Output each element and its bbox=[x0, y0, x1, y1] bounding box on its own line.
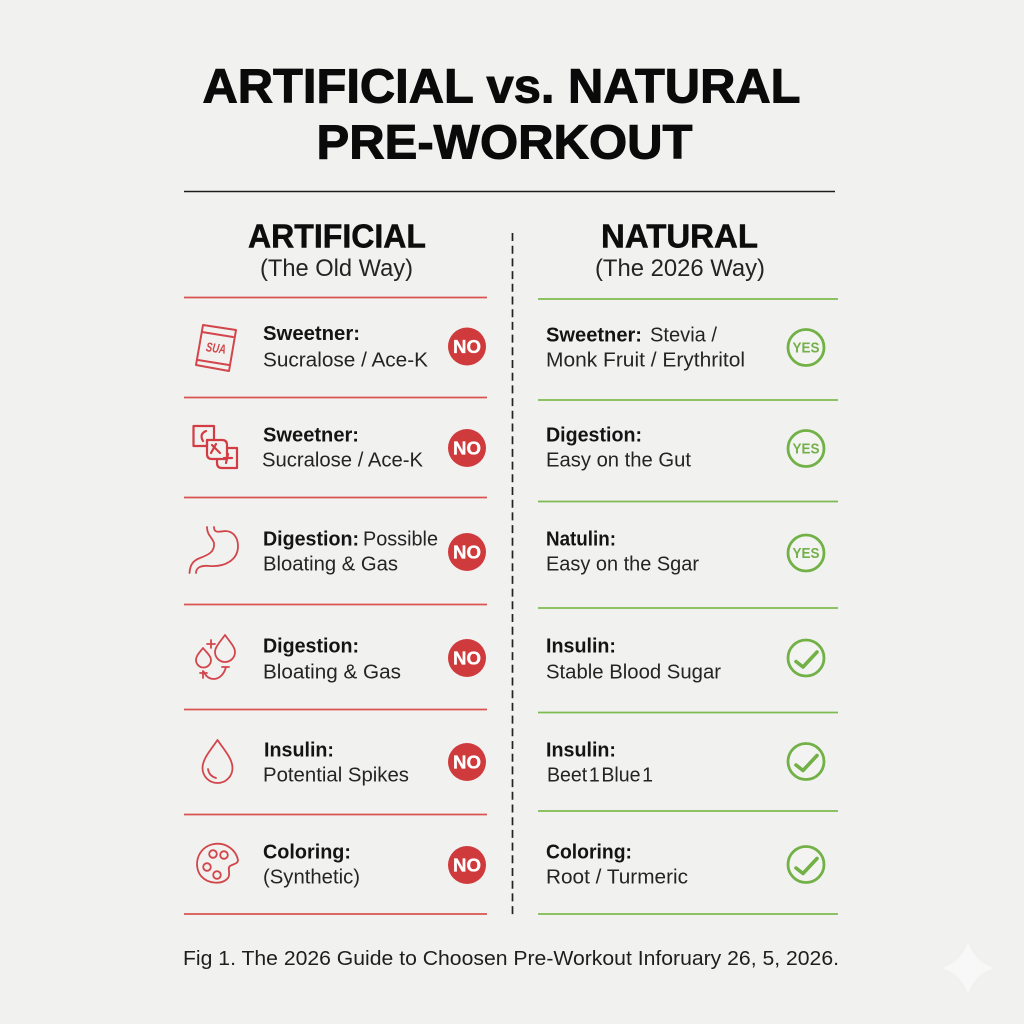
row: insulin stable: Stable Blood Sugar bbox=[546, 660, 721, 684]
badge: check bbox=[788, 846, 824, 882]
panel: artificial column bbox=[184, 298, 487, 914]
row: digestion bbox=[546, 424, 824, 472]
row: insulin: Potential Spikes bbox=[263, 764, 409, 786]
badge: no bbox=[448, 639, 486, 677]
badge: no: NO bbox=[453, 542, 481, 562]
row: sweetener packet bbox=[196, 322, 486, 372]
badge: no bbox=[448, 743, 486, 781]
row: insulin beet bbox=[546, 738, 824, 786]
title: PRE-WORKOUT bbox=[316, 116, 693, 170]
row: coloring bbox=[197, 840, 486, 888]
badge: no bbox=[448, 328, 486, 366]
row: digestion stomach: Digestion: bbox=[263, 528, 359, 550]
row: insulin beet: Insulin: bbox=[546, 738, 616, 762]
badge: yes bbox=[788, 330, 824, 366]
row: insulin stable bbox=[546, 634, 824, 684]
row: digestion drops: Bloating & Gas bbox=[263, 660, 401, 684]
icon: stomach bbox=[190, 527, 238, 573]
icon: drop bbox=[202, 740, 232, 783]
badge: yes: YES bbox=[792, 442, 820, 458]
row: sweetener: Monk Fruit / Erythritol bbox=[546, 348, 745, 372]
heading: natural: (The 2026 Way) bbox=[595, 255, 765, 282]
row: sweetener chemicals bbox=[194, 424, 486, 472]
row: insulin stable: Insulin: bbox=[546, 634, 616, 658]
icon: chemical tiles bbox=[194, 426, 237, 468]
row: digestion stomach bbox=[190, 527, 486, 576]
heading: artificial bbox=[248, 218, 426, 282]
row: coloring: Coloring: bbox=[546, 840, 632, 864]
title: ARTIFICIAL vs. NATURAL bbox=[202, 60, 800, 114]
row: coloring bbox=[546, 840, 824, 888]
badge: no: NO bbox=[453, 337, 481, 357]
title bbox=[202, 60, 800, 170]
row: digestion: Easy on the Gut bbox=[546, 448, 691, 472]
row: natulin: Natulin: bbox=[546, 528, 616, 550]
badge: no: NO bbox=[453, 648, 481, 668]
badge: no bbox=[448, 533, 486, 571]
icon: sparkle watermark bbox=[944, 944, 992, 992]
row: natulin: Easy on the Sgar bbox=[546, 552, 699, 576]
row: coloring: Coloring: bbox=[263, 840, 351, 864]
icon: palette bbox=[197, 844, 238, 883]
badge: no bbox=[448, 846, 486, 884]
row: digestion: Digestion: bbox=[546, 424, 642, 446]
row: insulin beet: Beet 1 Blue 1 bbox=[547, 764, 653, 786]
icon: sweetener packet: SUA bbox=[205, 339, 227, 357]
row: digestion drops bbox=[196, 634, 486, 684]
row: sweetener packet: Sweetner: bbox=[263, 322, 360, 345]
badge: yes bbox=[788, 430, 824, 466]
row: sweetener: Stevia / bbox=[650, 324, 717, 346]
icon: sweetener packet bbox=[196, 325, 236, 371]
row: sweetener packet: Sucralose / Ace-K bbox=[263, 348, 428, 372]
row: insulin bbox=[202, 738, 486, 786]
badge: yes: YES bbox=[792, 341, 820, 357]
caption: Fig 1. The 2026 Guide to Choosen Pre-Workout Inforuary 26, 5, 2026. bbox=[183, 947, 839, 970]
row: sweetener chemicals: Sweetner: bbox=[263, 424, 359, 446]
badge: no: NO bbox=[453, 856, 481, 876]
heading: artificial: (The Old Way) bbox=[260, 255, 413, 282]
badge: check bbox=[788, 640, 824, 676]
row: sweetener bbox=[546, 324, 824, 372]
heading: natural bbox=[595, 218, 765, 282]
badge: no: NO bbox=[453, 438, 481, 458]
row: insulin: Insulin: bbox=[264, 738, 334, 762]
heading: artificial: ARTIFICIAL bbox=[248, 218, 426, 254]
row: digestion stomach: Possible bbox=[363, 528, 438, 550]
panel: natural column bbox=[538, 299, 838, 914]
badge: yes: YES bbox=[792, 546, 820, 562]
row: sweetener: Sweetner: bbox=[546, 324, 642, 346]
badge: check bbox=[788, 744, 824, 780]
row: coloring: Root / Turmeric bbox=[546, 866, 688, 888]
heading: natural: NATURAL bbox=[601, 218, 758, 254]
row: sweetener chemicals: Sucralose / Ace-K bbox=[262, 448, 423, 472]
row: digestion drops: Digestion: bbox=[263, 634, 359, 658]
badge: yes bbox=[788, 535, 824, 571]
row: digestion stomach: Bloating & Gas bbox=[263, 552, 398, 576]
row: coloring: (Synthetic) bbox=[263, 866, 360, 888]
icon: drops bbox=[196, 635, 235, 679]
row: natulin bbox=[546, 528, 824, 576]
badge: no bbox=[448, 429, 486, 467]
badge: no: NO bbox=[453, 752, 481, 772]
